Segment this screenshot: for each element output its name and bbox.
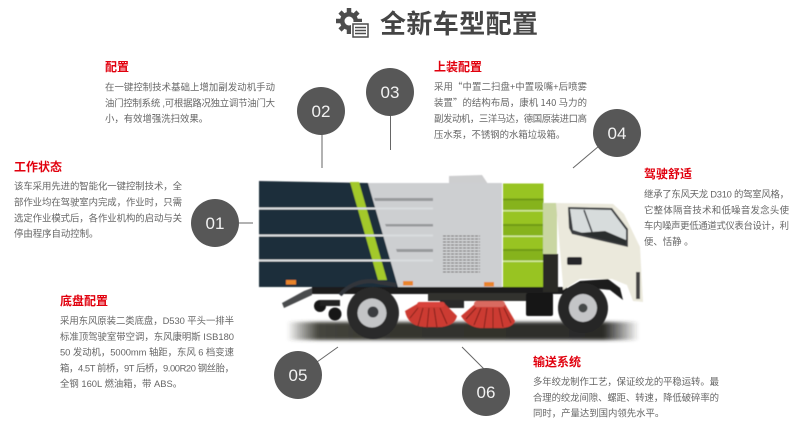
panel: 上装配置	[434, 59, 588, 140]
marker 05	[274, 347, 338, 399]
panel: 上装配置: 装置”的结构布局，康机 140 马力的	[434, 95, 587, 109]
rear mudguard	[340, 281, 396, 295]
panel: 工作状态: 部作业均在驾驶室内完成，作业时，只需	[14, 196, 182, 208]
brush right	[461, 301, 515, 328]
panel: 工作状态: 选定作业模式后，各作业机构的启动与关	[14, 212, 182, 223]
panel: 工作状态: 工作状态	[14, 159, 62, 174]
panel: 配置: 小，有效增强洗扫效果。	[105, 113, 208, 124]
panel: 底盘配置	[60, 293, 234, 389]
panel: 底盘配置: 50 发动机，5000mm 轴距，东风 6 档变速	[60, 346, 234, 358]
brush left	[405, 302, 457, 328]
marker 06	[462, 347, 510, 416]
front wheel	[558, 283, 608, 333]
panel: 驾驶舒适: 继承了东风天龙 D310 的驾室风格，	[644, 188, 789, 200]
title	[336, 8, 538, 39]
icon: gear with document	[336, 8, 370, 39]
panel: 上装配置: 采用“中置二扫盘+中置吸嘴+后喷雾	[434, 79, 588, 93]
panel: 输送系统: 输送系统	[533, 354, 581, 369]
vent grille	[443, 236, 480, 272]
panel: 上装配置: 压水泵，不锈钢的水箱垃圾箱。	[434, 129, 565, 140]
panel: 驾驶舒适: 它整体隔音技术和低噪音发念头使	[644, 204, 790, 216]
panel: 输送系统: 同时，产量达到国内领先水平。	[533, 407, 664, 418]
marker 04: 04	[608, 124, 626, 143]
panel: 工作状态: 停由程序自动控制。	[14, 228, 98, 239]
panel: 配置: 配置	[105, 60, 129, 74]
cargo body	[259, 175, 544, 288]
panel: 驾驶舒适	[644, 166, 790, 247]
panel: 配置: 油门控制系统 ,可根据路况独立调节油门大	[105, 97, 275, 108]
panel: 工作状态	[14, 159, 183, 239]
chassis	[282, 287, 567, 320]
marker 01	[191, 199, 253, 247]
panel: 上装配置: 上装配置	[434, 59, 482, 74]
cab window	[568, 207, 628, 247]
panel: 工作状态: 该车采用先进的智能化一键控制技术，全	[14, 180, 183, 192]
panel: 输送系统	[533, 354, 720, 418]
panel: 底盘配置: 采用东风原装二类底盘，D530 平头一排半	[60, 315, 234, 326]
panel: 驾驶舒适: 车内噪声更低通道式仪表台设计，利	[644, 220, 789, 231]
marker 02	[297, 87, 345, 168]
panel: 底盘配置: 全钢 160L 燃油箱，带 ABS。	[60, 378, 182, 389]
marker 03	[366, 68, 414, 150]
panel: 底盘配置: 底盘配置	[60, 293, 108, 308]
cab	[543, 203, 643, 315]
panel: 底盘配置: 标准顶驾驶室带空调，东风康明斯 ISB180	[60, 331, 234, 342]
green panel	[503, 184, 544, 288]
panel: 输送系统: 多年绞龙制作工艺，保证绞龙的平稳运转。最	[533, 376, 720, 387]
heading text: 全新车型配置	[380, 9, 538, 39]
panel: 配置	[105, 60, 275, 124]
marker 02: 02	[312, 102, 330, 121]
marker 06: 06	[477, 383, 495, 402]
panel: 驾驶舒适: 驾驶舒适	[644, 166, 692, 181]
panel: 底盘配置: 箱，4.5T 前桥，9T 后桥，9.00R20 钢丝胎，	[60, 362, 234, 373]
ground shadow	[287, 322, 639, 340]
rear wheel	[347, 287, 399, 339]
panel: 配置: 在一键控制技术基础上增加副发动机手动	[105, 82, 275, 92]
panel: 上装配置: 副发动机，三洋马达，德国原装进口高	[434, 113, 587, 124]
marker 04	[573, 109, 641, 168]
panel: 驾驶舒适: 便、恬静 。	[644, 236, 693, 247]
panel: 输送系统: 合理的绞龙间隙、螺距、转速，降低破碎率的	[533, 392, 719, 403]
marker 01: 01	[206, 214, 224, 233]
marker 05: 05	[289, 366, 307, 385]
truck image	[259, 175, 643, 340]
marker 03: 03	[381, 83, 399, 102]
